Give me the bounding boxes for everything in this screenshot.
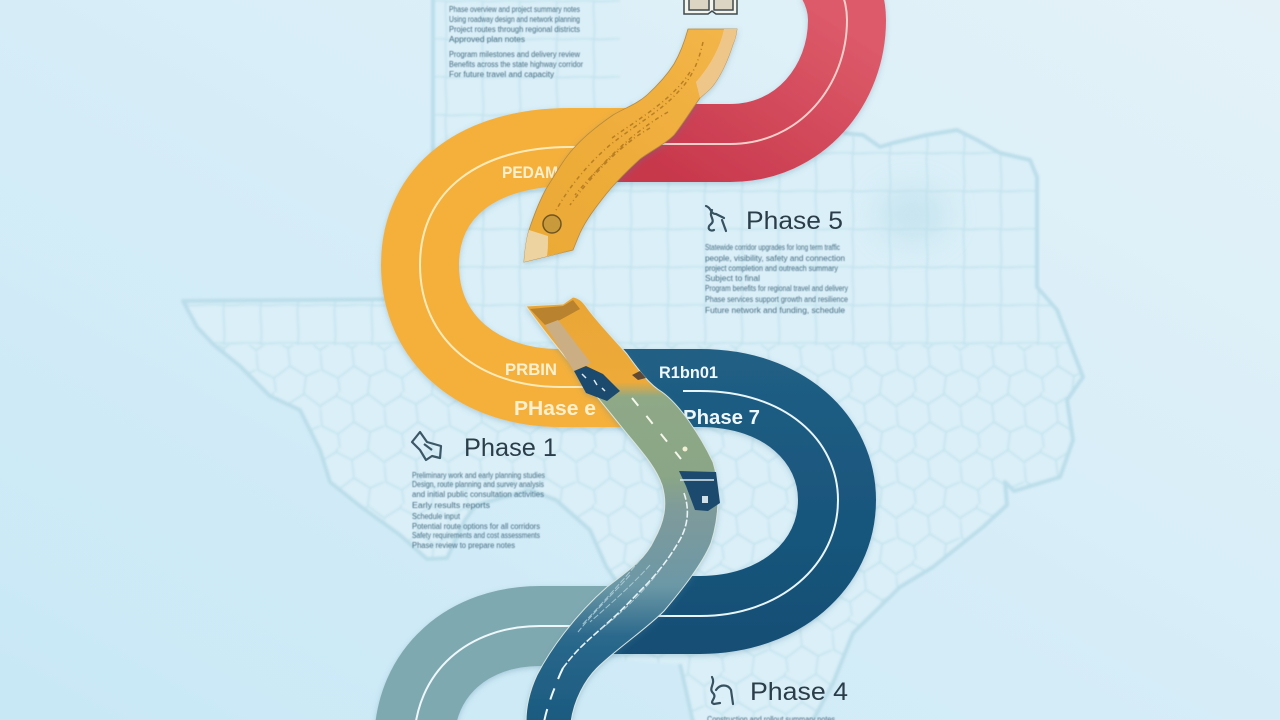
- body text: phase 5: Subject to final: [705, 274, 760, 283]
- top text block: Phase overview and project summary notes: [449, 5, 580, 14]
- icon: phase 5: [706, 206, 726, 231]
- map of Texas: [180, 0, 1090, 720]
- icon: open book: [684, 0, 737, 14]
- heading: phase 1: Phase 1: [464, 434, 557, 462]
- phase 4 block: [707, 677, 848, 720]
- road: navy block upper: [574, 366, 620, 401]
- road: navy block lower: [679, 471, 720, 511]
- top text block: Project routes through regional districts: [449, 25, 580, 34]
- icon: phase 4: [711, 677, 733, 704]
- body text: phase 1: Phase review to prepare notes: [412, 541, 515, 550]
- road: green section centre line: [632, 398, 681, 459]
- icon: gold coin: [543, 215, 561, 233]
- body text: phase 1: Schedule input: [412, 512, 461, 521]
- top text block: Approved plan notes: [449, 35, 525, 44]
- label: blue lower: Phase 7: [683, 407, 760, 429]
- body text: phase 5: project completion and outreach summary: [705, 264, 838, 273]
- phase 5 block: [705, 206, 848, 315]
- body text: phase 5: Statewide corridor upgrades for long term traffic: [705, 243, 840, 252]
- body text: phase 1: Potential route options for all corridors: [412, 522, 540, 531]
- heading: phase 4: Phase 4: [750, 678, 848, 706]
- top text block: Using roadway design and network planning: [449, 15, 580, 24]
- body text: phase 5: Program benefits for regional travel and delivery: [705, 284, 848, 293]
- body text: phase 5: Phase services support growth and resilience: [705, 295, 848, 304]
- top text block: [449, 5, 583, 79]
- road: brown edge: [530, 300, 580, 325]
- top text block: For future travel and capacity: [449, 70, 554, 79]
- label: yellow lower two: PHase e: [514, 398, 596, 420]
- body text: phase 1: [412, 471, 545, 550]
- body text: phase 5: [705, 243, 848, 315]
- body text: phase 1: Preliminary work and early planning studies: [412, 471, 545, 480]
- body text: phase 1: Safety requirements and cost assessments: [412, 531, 540, 540]
- label: blue upper: R1bn01: [659, 363, 718, 382]
- road: centre line lower: [563, 493, 687, 668]
- body text: phase 1: Design, route planning and survey analysis: [412, 480, 544, 489]
- body text: phase 1: and initial public consultation activities: [412, 490, 544, 499]
- blue road band: [570, 363, 838, 616]
- body text: phase 1: Early results reports: [412, 501, 490, 510]
- icon: phase 1: [412, 432, 441, 460]
- top yellow ribbon road: [524, 29, 737, 262]
- road: tan section: [545, 320, 591, 371]
- lower winding road: [526, 297, 720, 720]
- teal road band: [414, 626, 670, 720]
- top text block: Benefits across the state highway corridor: [449, 60, 583, 69]
- yellow road band: [420, 147, 670, 420]
- body text: phase 5: people, visibility, safety and connection: [705, 254, 845, 263]
- label: yellow upper: PEDAM: [502, 163, 558, 182]
- label: yellow lower one: PRBIN: [505, 360, 557, 379]
- red road band: [590, 0, 847, 144]
- heading: phase 5: Phase 5: [746, 207, 843, 235]
- body text: phase 5: Future network and funding, schedule: [705, 306, 846, 315]
- phase 1 block: [412, 432, 557, 550]
- top text block: Program milestones and delivery review: [449, 50, 580, 59]
